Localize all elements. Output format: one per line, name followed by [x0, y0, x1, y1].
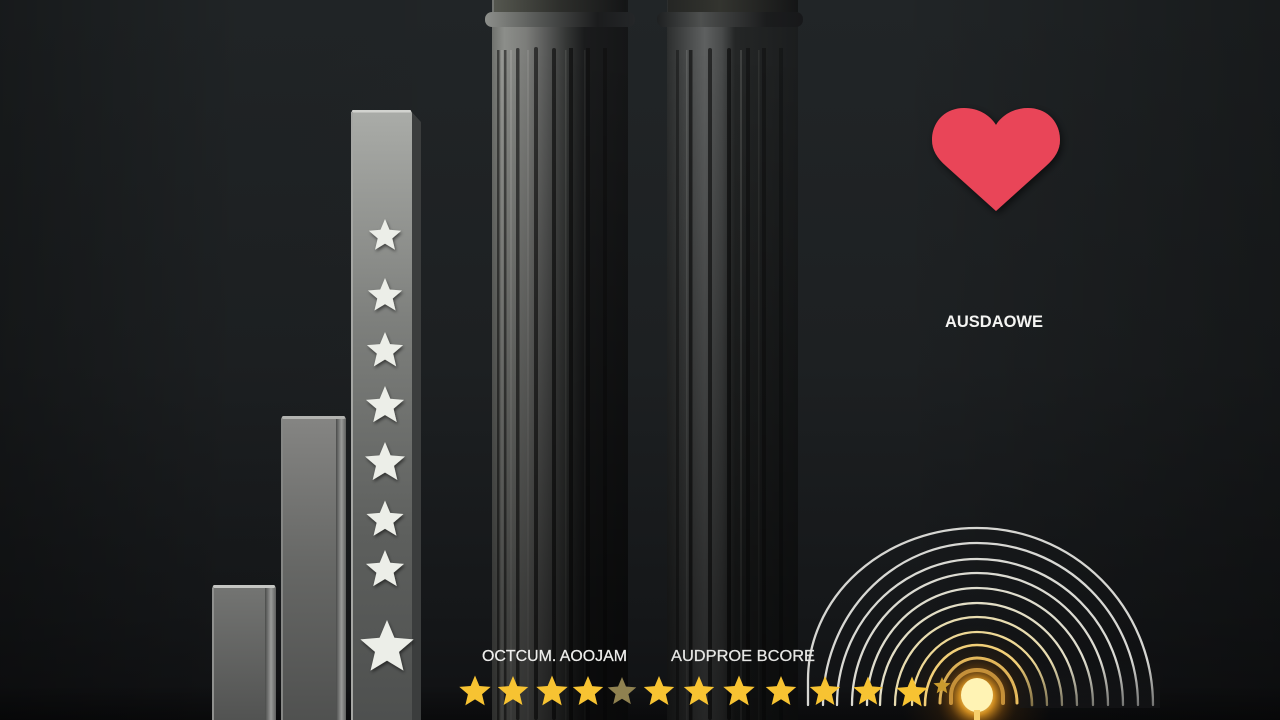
bar chart: three rising bars: [212, 110, 421, 720]
right column: [657, 0, 803, 720]
left column: [485, 0, 635, 720]
left column capital: [485, 0, 635, 27]
concentric arc gauge: [808, 528, 1160, 720]
right column capital: [657, 0, 803, 27]
heart caption: AUSDAOWE: [945, 313, 1043, 331]
glowing light source: [935, 655, 1019, 720]
gold star rating row: [459, 676, 951, 706]
icon: heart: [932, 108, 1060, 211]
label: right column caption: AUDPROE BCORE: [671, 648, 815, 665]
label: left column caption: OCTCUM. AOOJAM: [482, 648, 627, 665]
white stars on tall bar: [360, 219, 414, 671]
bar: short: [212, 585, 276, 720]
bar: tall: [351, 110, 421, 720]
bar: medium: [281, 416, 346, 720]
